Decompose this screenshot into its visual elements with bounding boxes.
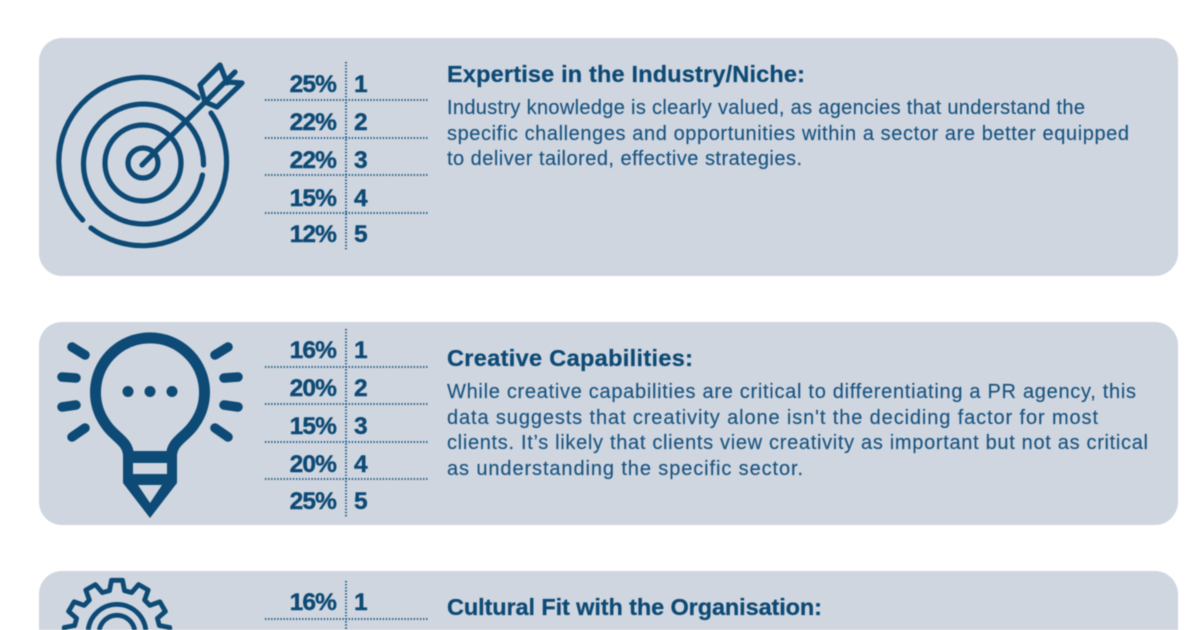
text block: expertise description: Industry knowledge is clearly valued, as agencies that understand the — [447, 97, 1085, 119]
heading: expertise: Expertise in the Industry/Niche: — [447, 61, 805, 87]
icon: target with arrow — [59, 65, 242, 246]
text block: creative description: as understanding the specific sector. — [447, 458, 803, 480]
stats: ratings 1 to 5: 1 — [354, 71, 368, 98]
text block: expertise description: specific challenges and opportunities within a sector are better equipped — [447, 123, 1129, 145]
text block: creative description: While creative capabilities are critical to differentiating a PR agency, this — [447, 381, 1136, 403]
stats: ratings 1 to 5: 22% — [290, 147, 337, 174]
stats: ratings 1 to 5: 5 — [354, 488, 368, 515]
stats: ratings 1 to 5: 15% — [290, 185, 337, 212]
stats: ratings 1 to 5: 4 — [354, 185, 368, 212]
stats: ratings 1 to 5: 2 — [354, 375, 368, 402]
stats: ratings: 16% — [290, 589, 337, 616]
panel: cultural fit — [39, 571, 1178, 630]
panel: creative capabilities — [39, 322, 1178, 525]
stats: ratings 1 to 5: 20% — [290, 451, 337, 478]
stats: ratings 1 to 5: 15% — [290, 413, 337, 440]
stats: ratings 1 to 5: 22% — [290, 109, 337, 136]
heading: creative capabilities: Creative Capabilities: — [447, 345, 693, 371]
text block: creative description — [447, 381, 1148, 480]
stats: ratings 1 to 5: 3 — [354, 413, 368, 440]
stats: ratings 1 to 5: 4 — [354, 451, 368, 478]
heading: cultural fit: Cultural Fit with the Organisation: — [447, 594, 822, 620]
icon: gear — [64, 580, 170, 630]
stats: ratings 1 to 5: 5 — [354, 221, 368, 248]
text block: expertise description: to deliver tailored, effective strategies. — [447, 148, 802, 170]
stats: ratings 1 to 5: 12% — [290, 221, 337, 248]
stats: ratings: 1 — [354, 589, 368, 616]
stats: ratings 1 to 5: 1 — [354, 337, 368, 364]
stats: ratings 1 to 5: 16% — [290, 337, 337, 364]
stats: ratings — [265, 581, 428, 630]
stats: ratings 1 to 5: 25% — [290, 71, 337, 98]
text block: expertise description — [447, 97, 1129, 170]
panel: expertise in the industry — [39, 38, 1178, 276]
stats: ratings 1 to 5: 3 — [354, 147, 368, 174]
stats: ratings 1 to 5 — [265, 62, 428, 250]
stats: ratings 1 to 5: 20% — [290, 375, 337, 402]
stats: ratings 1 to 5: 2 — [354, 109, 368, 136]
stats: ratings 1 to 5 — [265, 329, 428, 518]
text block: creative description: clients. It’s likely that clients view creativity as important but not as critical — [447, 432, 1148, 454]
text block: creative description: data suggests that creativity alone isn't the deciding factor for most — [447, 407, 1098, 429]
stats: ratings 1 to 5: 25% — [290, 488, 337, 515]
icon: light bulb — [62, 338, 238, 518]
